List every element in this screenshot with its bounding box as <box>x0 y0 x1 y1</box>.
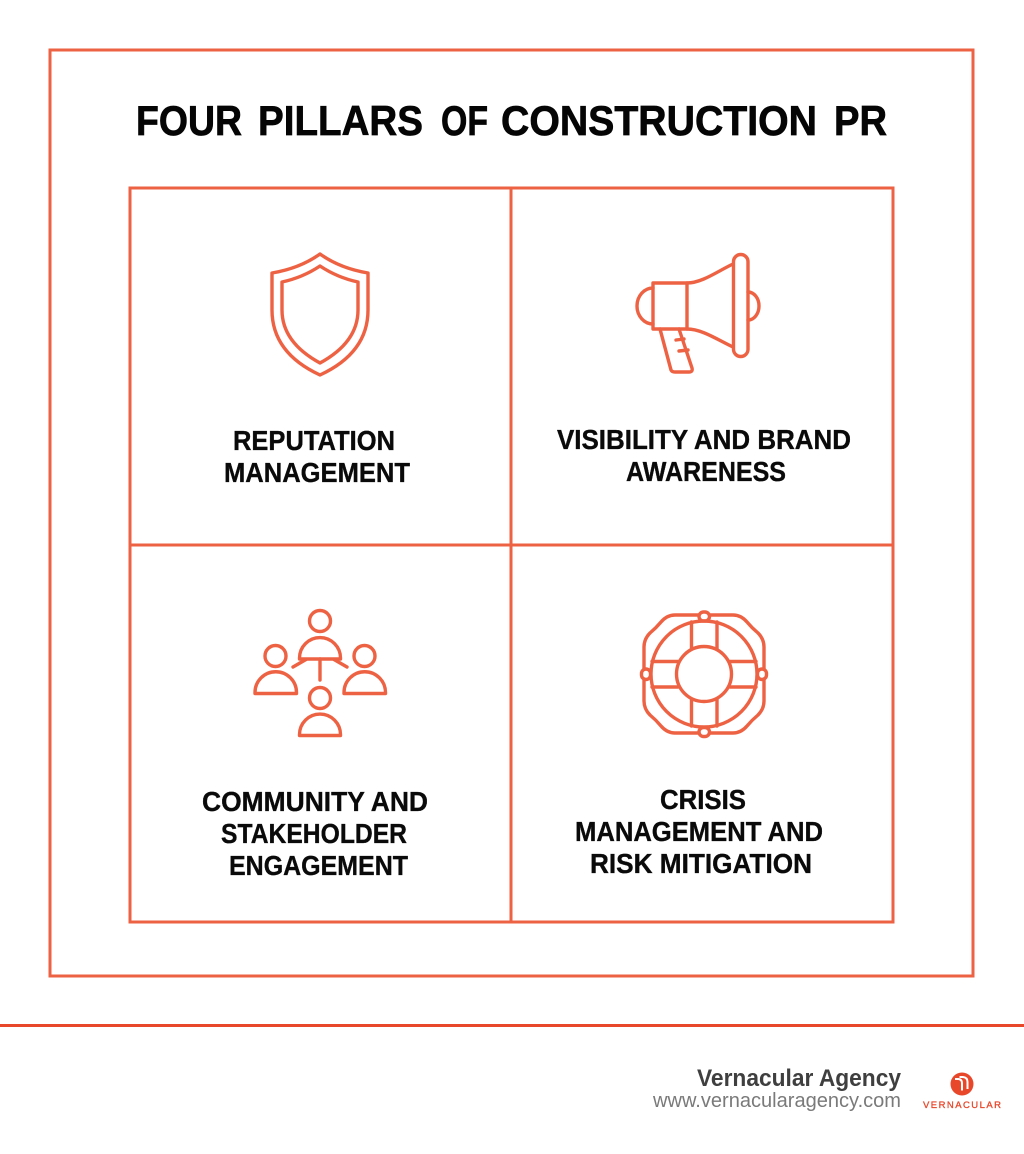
label: reputation management: MANAGEMENT <box>224 457 410 488</box>
panel: crisis management and risk mitigation <box>575 612 823 879</box>
title: PILLARS <box>258 97 423 144</box>
label: reputation management <box>224 425 410 488</box>
title: OF <box>441 97 488 144</box>
label: crisis management and risk mitigation: RISK MITIGATION <box>590 848 812 879</box>
outer frame <box>50 50 973 976</box>
label: community and stakeholder engagement <box>202 786 428 881</box>
label: crisis management and risk mitigation: MANAGEMENT AND <box>575 816 823 847</box>
title: CONSTRUCTION <box>501 97 817 144</box>
label: community and stakeholder engagement: COMMUNITY AND <box>202 786 428 817</box>
footer: logo: VERNACULAR <box>923 1100 1001 1111</box>
label: crisis management and risk mitigation <box>575 784 823 879</box>
footer: agency name: Vernacular Agency <box>697 1065 902 1092</box>
footer: logo <box>923 1072 1001 1111</box>
panel: community and stakeholder engagement <box>202 610 428 881</box>
footer divider <box>0 1024 1024 1027</box>
title: PR <box>834 97 887 144</box>
label: crisis management and risk mitigation: CRISIS <box>660 784 746 815</box>
title: FOUR <box>136 97 242 144</box>
pillars grid <box>130 188 893 922</box>
label: visibility and brand awareness: AWARENESS <box>626 456 786 487</box>
icon: shield <box>272 254 368 375</box>
label: visibility and brand awareness <box>557 424 851 487</box>
icon: megaphone <box>637 254 759 372</box>
footer: website: www.vernacularagency.com <box>652 1090 901 1112</box>
label: reputation management: REPUTATION <box>233 425 395 456</box>
panel: visibility and brand awareness <box>557 254 851 487</box>
icon: connected people <box>255 610 386 736</box>
label: community and stakeholder engagement: ENGAGEMENT <box>229 850 408 881</box>
label: community and stakeholder engagement: STAKEHOLDER <box>221 818 407 849</box>
icon: life buoy <box>642 612 766 736</box>
panel: reputation management <box>224 254 410 488</box>
title <box>136 97 887 144</box>
label: visibility and brand awareness: VISIBILITY AND BRAND <box>557 424 851 455</box>
